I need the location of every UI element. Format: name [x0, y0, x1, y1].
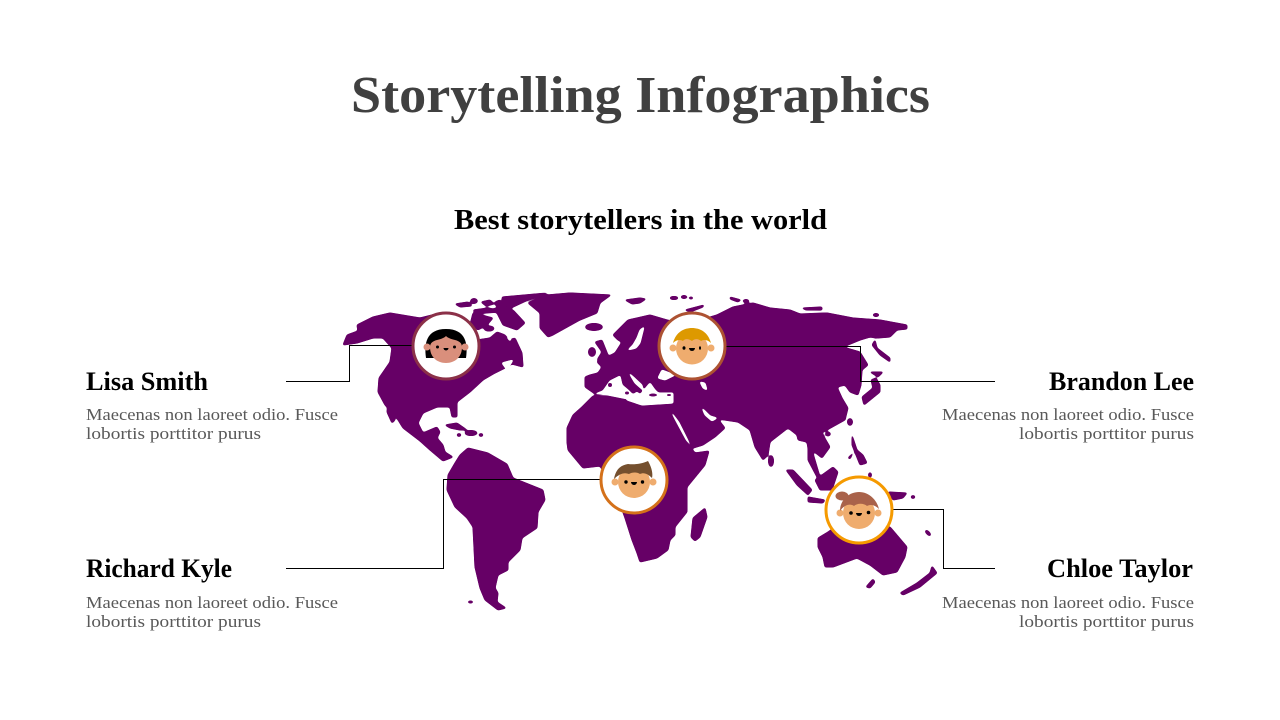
map: Madagascar — [691, 508, 707, 541]
person: Lisa Smith — [86, 367, 338, 443]
map: Canadian Arctic islands — [455, 293, 547, 331]
map: Arctic and European islands — [586, 296, 879, 360]
description: Maecenas non laoreet odio. Fusce — [942, 405, 1194, 424]
person: Brandon Lee — [942, 367, 1194, 443]
map: Africa — [567, 396, 709, 562]
avatar: Brandon Lee — [659, 313, 725, 379]
map: North America — [343, 313, 523, 461]
title: Storytelling Infographics — [351, 67, 930, 124]
description: Maecenas non laoreet odio. Fusce — [942, 593, 1194, 612]
description: lobortis porttitor purus — [1019, 612, 1194, 631]
name: Chloe Taylor — [1047, 554, 1193, 583]
map: Greenland — [528, 293, 611, 337]
map: inland seas — [502, 327, 717, 421]
map: South America — [447, 448, 545, 610]
map: Australia — [818, 520, 907, 575]
map: Baja California — [387, 403, 395, 423]
world map — [343, 293, 937, 610]
map: Caribbean — [445, 423, 483, 436]
description: Maecenas non laoreet odio. Fusce — [86, 405, 338, 424]
connector: Lisa Smith — [286, 346, 415, 382]
avatar: Chloe Taylor — [826, 477, 892, 543]
description: lobortis porttitor purus — [86, 612, 261, 631]
connector: Richard Kyle — [286, 480, 601, 568]
avatar: Richard Kyle — [601, 447, 667, 513]
map: Asia-Pacific islands — [768, 340, 937, 595]
name: Brandon Lee — [1049, 367, 1194, 396]
person: Chloe Taylor — [942, 554, 1194, 631]
connector: Chloe Taylor — [892, 510, 995, 568]
map: Falkland — [468, 601, 473, 603]
description: lobortis porttitor purus — [1019, 424, 1194, 443]
person: Richard Kyle — [86, 554, 338, 631]
description: lobortis porttitor purus — [86, 424, 261, 443]
description: Maecenas non laoreet odio. Fusce — [86, 593, 338, 612]
map: Mediterranean islands — [608, 383, 671, 396]
name: Lisa Smith — [86, 367, 209, 396]
avatar: Lisa Smith — [413, 313, 479, 379]
connector: Brandon Lee — [726, 346, 995, 382]
subtitle: Best storytellers in the world — [454, 205, 827, 236]
map: Eurasia — [585, 303, 907, 477]
name: Richard Kyle — [86, 554, 232, 583]
